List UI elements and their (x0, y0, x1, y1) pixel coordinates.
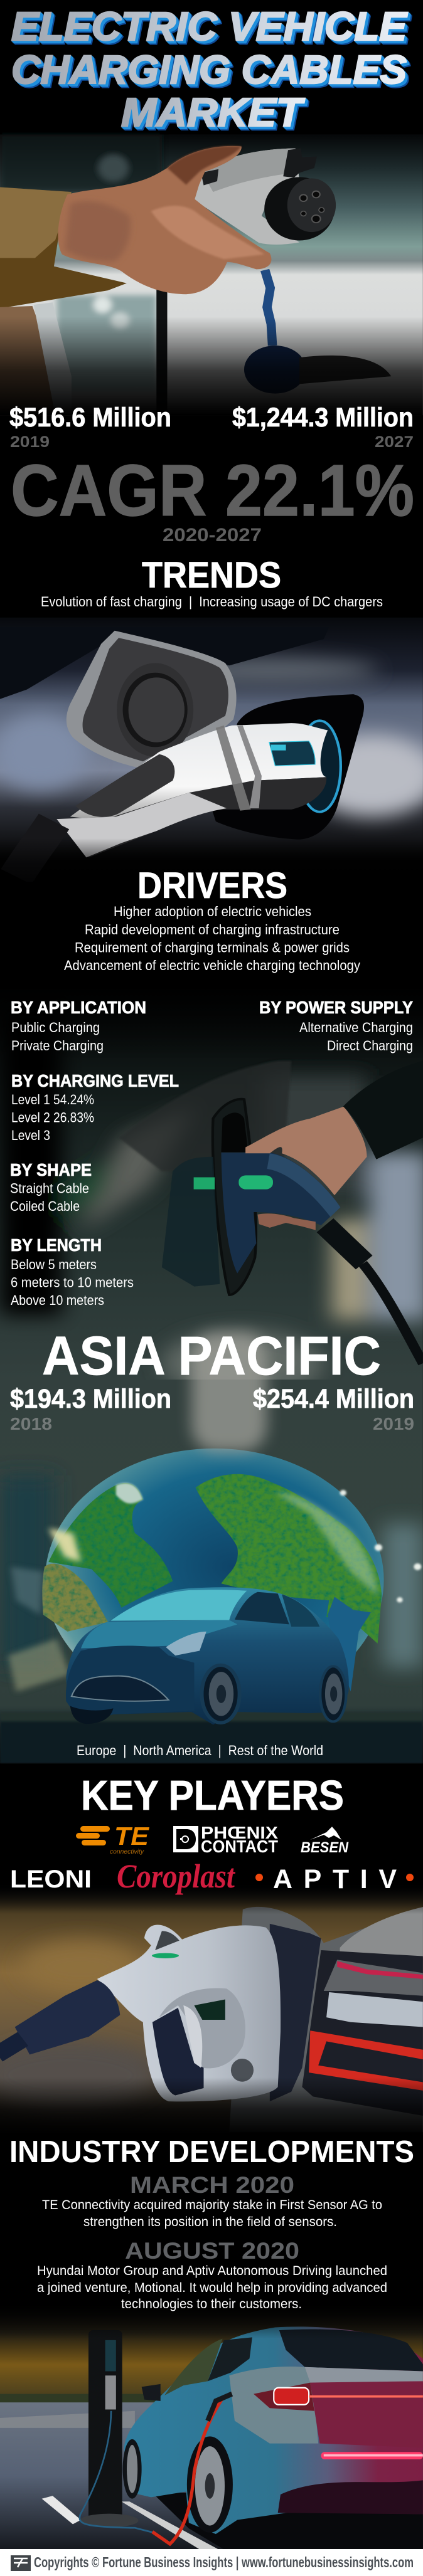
drivers list (64, 904, 360, 973)
market size 2019: 2019 (10, 433, 50, 451)
plug handle opening (159, 1988, 245, 2068)
drivers list: Higher adoption of electric vehicles (114, 904, 311, 919)
segment: by application: Public Charging (11, 1020, 100, 1035)
regional value 2019 (253, 1384, 414, 1433)
segment: by shape: BY SHAPE (10, 1160, 92, 1180)
parking lines (0, 2411, 218, 2550)
port rim and recess (162, 1099, 256, 1295)
logo: TE connectivity (76, 1822, 150, 1855)
title: MARKET (121, 90, 305, 135)
connector body (193, 149, 299, 245)
segment: by charging level (11, 1071, 179, 1143)
ribbed cable (16, 821, 54, 877)
market size 2019 (9, 403, 171, 451)
regional value 2019: 2019 (373, 1414, 414, 1433)
photo: car charging at post (0, 2302, 423, 2550)
globe (42, 1449, 384, 1711)
photo: hand holding EV charging connector (0, 134, 423, 415)
cable boot (15, 1980, 120, 2054)
logo: Aptiv: APTIV (273, 1864, 397, 1894)
segment: by power supply: Direct Charging (327, 1038, 413, 1053)
segment: by length: Below 5 meters (11, 1257, 97, 1272)
logo: Phoenix Contact (173, 1823, 278, 1856)
development: August 2020: Hyundai Motor Group and Aptiv Autonomous Driving launched (37, 2264, 387, 2278)
fuel door flap (67, 631, 237, 769)
footer bar (0, 2549, 423, 2576)
drivers heading: DRIVERS (137, 865, 287, 906)
segment: by power supply: Alternative Charging (299, 1020, 413, 1035)
segment: by application: Private Charging (11, 1038, 104, 1053)
drivers list: Rapid development of charging infrastructure (85, 922, 340, 937)
development: March 2020: strengthen its position in the field of sensors. (83, 2215, 337, 2229)
development: March 2020 (42, 2172, 382, 2229)
segment: by application: BY APPLICATION (11, 998, 146, 1017)
logo: Coroplast: Coroplast (117, 1857, 236, 1895)
plug body (97, 1925, 281, 2101)
segment: by shape: Coiled Cable (10, 1198, 80, 1214)
connector handle (221, 1153, 340, 1274)
charging cable (156, 288, 167, 415)
car rear body (229, 1907, 423, 2132)
development: August 2020 (37, 2238, 387, 2311)
car door panel (119, 1061, 291, 1171)
development: March 2020: TE Connectivity acquired majority stake in First Sensor AG to (42, 2198, 382, 2212)
regional value 2018 (10, 1384, 171, 1433)
charge port recess (210, 694, 364, 840)
segment: by shape (10, 1160, 92, 1214)
Asia Pacific heading: ASIA PACIFIC (42, 1326, 381, 1386)
release button (231, 2059, 254, 2082)
market size 2019: $516.6 Million (9, 403, 171, 433)
plug grip (75, 754, 174, 817)
title: CHARGING CABLES (11, 47, 407, 92)
drivers list: Advancement of electric vehicle charging technology (64, 958, 360, 973)
coiled blue cap cord (265, 270, 272, 346)
key players heading: KEY PLAYERS (81, 1772, 344, 1819)
photo: white charging plug in car rear (0, 1886, 423, 2135)
photo: hand plugging connector into car (0, 1027, 423, 1380)
development: August 2020: a joined venture, Motional. It would help in providing advanced (37, 2281, 387, 2295)
status light (238, 1175, 273, 1190)
haze above globe (191, 1333, 267, 1452)
logo: TE connectivity: TE (114, 1822, 150, 1850)
blurred backdrop and bokeh (0, 134, 162, 391)
jacket sleeve (343, 1077, 423, 1159)
logo: Besen: BESEN (301, 1839, 349, 1856)
logo: Phoenix Contact: PHŒNIX (201, 1823, 278, 1842)
market size 2027: 2027 (375, 433, 414, 451)
hand (245, 1107, 367, 1195)
photo: charging plug with display in car port (0, 618, 423, 882)
glowing blue ring (299, 721, 341, 812)
photo: globe with electric car (0, 1380, 423, 1763)
electric car (66, 1587, 349, 1724)
car shadow (151, 2491, 423, 2550)
plug head (70, 723, 328, 821)
trends heading: TRENDS (142, 555, 281, 596)
development: August 2020: AUGUST 2020 (125, 2238, 299, 2264)
car charge cable (153, 2398, 223, 2544)
segment: by length: BY LENGTH (11, 1235, 102, 1255)
road (0, 1721, 423, 1763)
development: March 2020: MARCH 2020 (130, 2172, 294, 2198)
logo: Phoenix Contact: CONTACT (201, 1837, 278, 1856)
light specks (340, 1490, 421, 1603)
other regions: Europe | North America | Rest of the World (77, 1743, 323, 1758)
wheels (123, 2436, 233, 2533)
jacket sleeve (0, 187, 127, 309)
segment: by shape: Straight Cable (10, 1180, 89, 1196)
connector socket (264, 177, 336, 240)
segment: by length: 6 meters to 10 meters (11, 1274, 134, 1291)
tail lights (274, 2388, 423, 2459)
car (124, 2326, 423, 2534)
title: ELECTRIC VEHICLE (11, 4, 408, 49)
title (11, 4, 408, 135)
trends text: Evolution of fast charging | Increasing usage of DC chargers (41, 594, 383, 610)
footer logo (11, 2555, 31, 2571)
industry developments heading: INDUSTRY DEVELOPMENTS (9, 2135, 414, 2169)
logo: Leoni: LEONI (10, 1866, 92, 1893)
segment: by charging level: Level 3 (11, 1127, 50, 1143)
drivers list: Requirement of charging terminals & power grids (75, 939, 350, 956)
segment: by application (11, 998, 146, 1053)
CAGR headline: 2020-2027 (163, 525, 262, 546)
development: August 2020: technologies to their customers. (121, 2297, 302, 2311)
segment: by length (11, 1235, 134, 1308)
segment: by power supply (259, 998, 413, 1053)
blue charge cable (80, 2411, 154, 2533)
charging cable (0, 2039, 23, 2054)
segment: by charging level: BY CHARGING LEVEL (11, 1071, 179, 1090)
market size 2027 (232, 403, 414, 451)
segment: by charging level: Level 1 54.24% (11, 1092, 94, 1107)
indicator light (152, 1953, 179, 1958)
segment: by length: Above 10 meters (11, 1292, 104, 1308)
logo: TE connectivity: connectivity (110, 1849, 144, 1855)
logo: Besen (301, 1827, 349, 1856)
charging status display (269, 741, 315, 766)
regional value 2018: $194.3 Million (10, 1384, 171, 1414)
energy sparks (8, 1528, 81, 1692)
segment: by charging level: Level 2 26.83% (11, 1110, 94, 1125)
cable (325, 1225, 364, 1262)
hand (58, 146, 271, 294)
charging post (80, 2330, 138, 2527)
regional value 2018: 2018 (10, 1414, 52, 1433)
